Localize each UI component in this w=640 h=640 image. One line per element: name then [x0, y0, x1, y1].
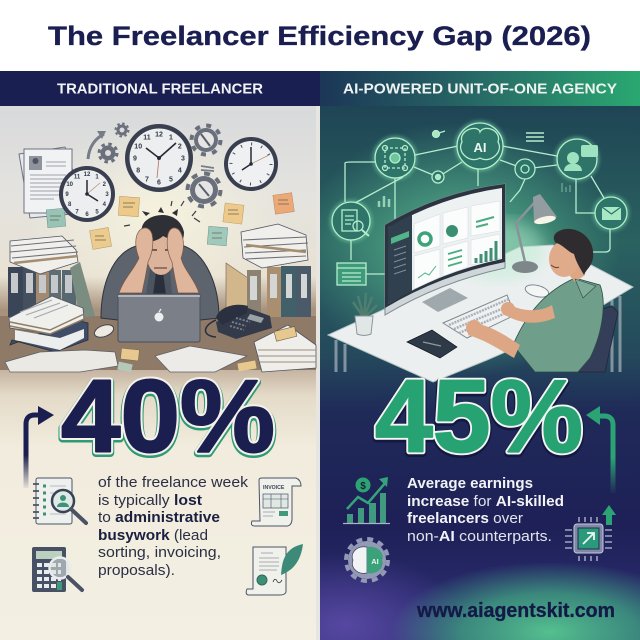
icon: invoice — [251, 478, 301, 526]
clock: large — [125, 124, 193, 192]
left body text: of the freelance week — [98, 474, 248, 491]
clock: large: 5 — [169, 176, 173, 183]
mouse — [93, 322, 115, 340]
clock: small left: 10 — [66, 182, 74, 188]
icon: ai brain gear: AI — [371, 557, 379, 566]
clock: large: 11 — [143, 135, 151, 142]
desk lamp — [512, 194, 557, 273]
left body text: to administrative — [98, 509, 220, 526]
big number 40%: 40% — [61, 358, 275, 474]
icon: earnings chart: $ — [360, 481, 366, 492]
paper stack with binder, front left — [9, 296, 88, 352]
panel: traditional freelancer — [0, 71, 320, 640]
big number 45%: 45% — [375, 358, 583, 474]
clock: large: 4 — [178, 168, 182, 174]
desk — [0, 316, 316, 370]
paper stack upper left — [10, 236, 78, 274]
binders left — [8, 262, 95, 318]
right body text: freelancers over — [407, 510, 523, 527]
big number 45%: 45% — [375, 360, 583, 475]
desk papers — [5, 325, 316, 372]
website url: www.aiagentskit.com — [416, 600, 615, 622]
icon: earnings chart — [343, 477, 390, 524]
left body text: proposals). — [98, 562, 175, 579]
clock: large: 6 — [157, 180, 161, 186]
keyboard and mouse — [443, 283, 550, 338]
clock: large: 10 — [134, 144, 142, 150]
arrow: up to 40% — [26, 406, 54, 488]
right body text: non-AI counterparts. — [407, 528, 552, 545]
left body text: sorting, invoicing, — [98, 544, 221, 561]
potted plant — [353, 293, 377, 336]
clock: small left: 7 — [75, 209, 79, 215]
clock: small left: 2 — [103, 182, 107, 188]
icon: address book with magnifier — [33, 478, 86, 524]
freelancer at desk — [466, 229, 603, 372]
icon: invoice: INVOICE — [263, 485, 285, 491]
clock: small left: 9 — [65, 192, 69, 198]
big number 40%: 40% — [61, 360, 275, 475]
clock: large: 1 — [169, 135, 173, 142]
binders and stack right — [226, 224, 311, 317]
right body text — [407, 475, 564, 545]
left header bar: TRADITIONAL FREELANCER — [57, 80, 263, 98]
left header bar — [0, 71, 320, 106]
clock: small left: 3 — [105, 192, 109, 198]
document with photo — [19, 147, 76, 218]
right body text: increase for AI-skilled — [407, 493, 564, 510]
right body text: Average earnings — [407, 475, 533, 492]
clock: large: 9 — [133, 156, 137, 162]
clock: large: 3 — [181, 156, 185, 162]
arrow: up to 45% — [586, 406, 613, 493]
panel: ai-powered agency — [320, 71, 640, 640]
gears and arrows — [88, 124, 220, 206]
left body text: is typically lost — [98, 492, 202, 509]
clock: right — [224, 137, 278, 191]
icon: contract with quill — [246, 544, 303, 595]
clock: small left: 4 — [103, 202, 107, 208]
big number 40%: 40% — [61, 358, 275, 474]
monitor — [385, 184, 505, 315]
clock: large: 12 — [155, 132, 163, 138]
sticky notes — [46, 193, 294, 249]
chair — [557, 306, 618, 372]
notebook — [407, 330, 457, 358]
clock: small left — [59, 166, 115, 222]
stressed freelancer — [101, 201, 219, 320]
clock: small left: 12 — [84, 172, 91, 178]
right header bar: AI-POWERED UNIT-OF-ONE AGENCY — [343, 80, 617, 98]
icon: calculator with magnifier — [32, 547, 82, 592]
ai network — [332, 123, 627, 285]
white desk — [328, 245, 633, 382]
clock: small left: 1 — [95, 175, 99, 181]
clock: large: 2 — [178, 144, 182, 150]
clock: large: 8 — [136, 168, 140, 174]
ai badge: AI — [474, 140, 486, 155]
clock: small left: 8 — [68, 202, 72, 208]
icon: chip with arrow — [565, 505, 616, 561]
big number 45%: 45% — [375, 358, 583, 474]
right header bar — [320, 71, 640, 106]
title: The Freelancer Efficiency Gap (2026) — [48, 21, 591, 51]
left body text: busywork (lead — [98, 527, 208, 544]
clock: small left: 6 — [85, 212, 89, 218]
left body text — [98, 474, 248, 579]
desk phone — [206, 305, 272, 339]
clock: small left: 11 — [74, 175, 81, 181]
icon: ai brain gear — [346, 539, 388, 581]
clock: small left: 5 — [95, 209, 99, 215]
laptop — [118, 294, 200, 342]
clock: large: 7 — [145, 176, 149, 183]
